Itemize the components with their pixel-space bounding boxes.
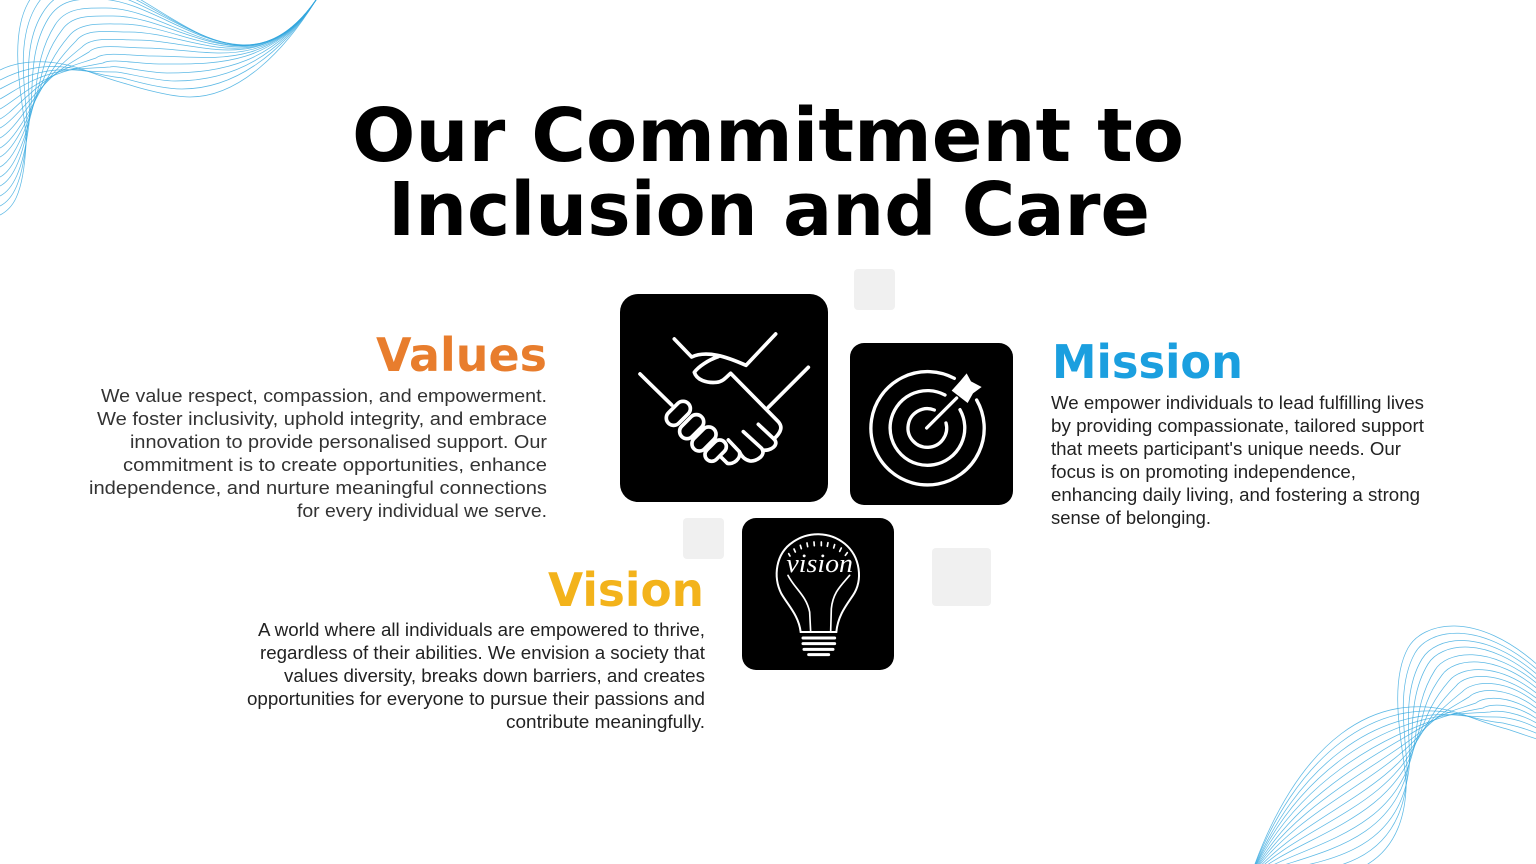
text block: values description: innovation to provide personalised support. Our [130, 431, 547, 452]
text block: values description: for every individual we serve. [297, 500, 547, 521]
text block: mission description: by providing compassionate, tailored support [1051, 415, 1424, 436]
text block: vision description: contribute meaningfully. [506, 711, 705, 732]
decorative grey square: left [683, 518, 724, 559]
decorative grey square: right [932, 548, 991, 606]
title: Inclusion and Care [388, 167, 1150, 253]
text block: values description: commitment is to create opportunities, enhance [123, 454, 547, 475]
text block: mission description [1051, 392, 1424, 528]
title: Our Commitment to [352, 93, 1184, 179]
text block: vision description: A world where all individuals are empowered to thrive, [258, 619, 705, 640]
text block: mission description: sense of belonging. [1051, 507, 1211, 528]
text block: mission description: We empower individuals to lead fulfilling lives [1051, 392, 1424, 413]
text block: mission description: focus is on promoting independence, [1051, 461, 1356, 482]
icon: light bulb with vision lettering: vision [786, 548, 853, 578]
text block: values description: independence, and nurture meaningful connections [89, 477, 547, 498]
icon: handshake [620, 294, 828, 502]
heading: vision: Vision [548, 563, 704, 617]
text block: values description [89, 385, 547, 521]
text block: mission description: enhancing daily living, and fostering a strong [1051, 484, 1420, 505]
text block: values description: We foster inclusivity, uphold integrity, and embrace [97, 408, 547, 429]
text block: mission description: that meets participant's unique needs. Our [1051, 438, 1401, 459]
text block: vision description: values diversity, breaks down barriers, and creates [284, 665, 705, 686]
decorative wave: top left [0, 0, 316, 215]
panel: values [89, 328, 547, 521]
panel: vision [247, 563, 705, 732]
panel: mission [1051, 335, 1424, 528]
text block: vision description: opportunities for everyone to pursue their passions and [247, 688, 705, 709]
heading: values: Values [376, 328, 547, 382]
text block: vision description: regardless of their abilities. We envision a society that [260, 642, 705, 663]
title [352, 93, 1184, 253]
text block: values description: We value respect, compassion, and empowerment. [101, 385, 547, 406]
decorative grey square: top [854, 269, 895, 310]
text block: vision description [247, 619, 705, 732]
icon: light bulb with vision lettering [742, 518, 894, 670]
heading: mission: Mission [1052, 335, 1243, 389]
decorative wave: bottom right [1250, 626, 1536, 864]
icon: target with arrow [850, 343, 1013, 505]
